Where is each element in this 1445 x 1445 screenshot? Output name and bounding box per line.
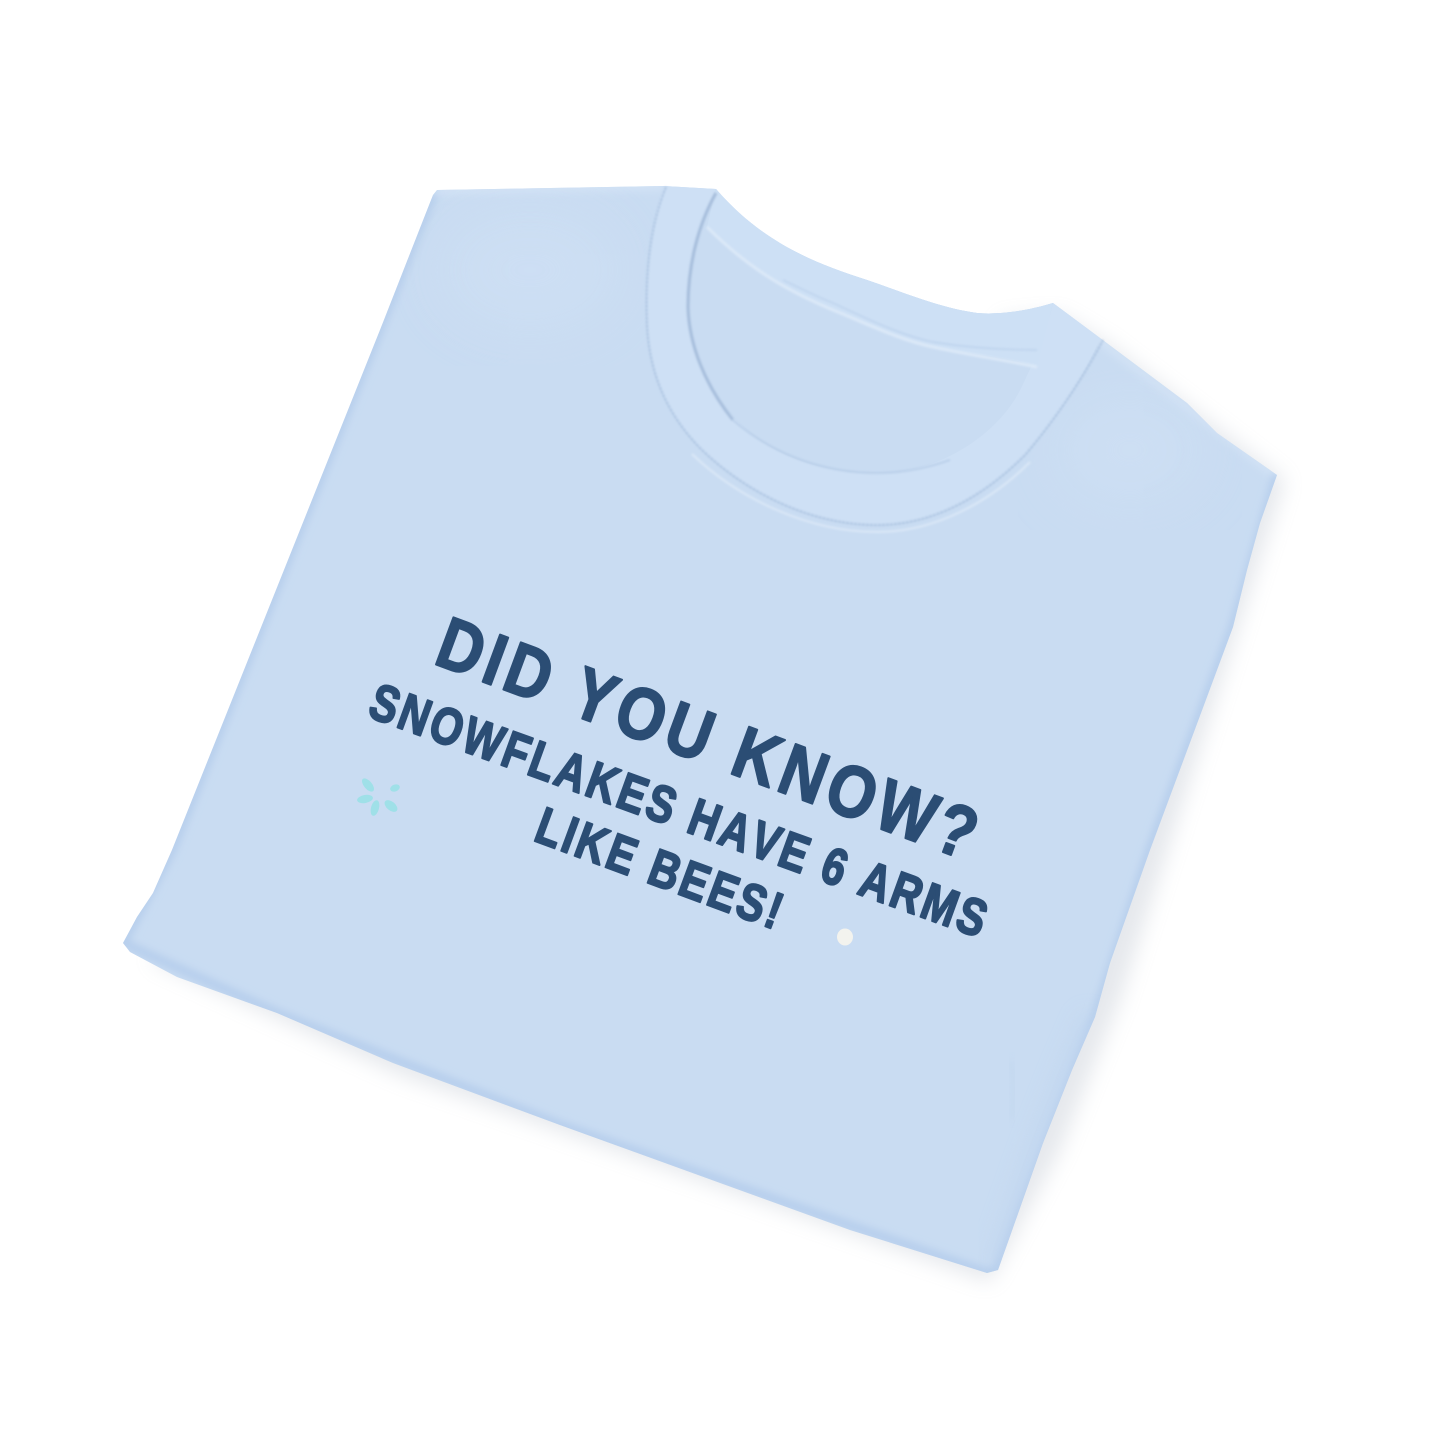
printed heading: did you know: DID YOU KNOW? [426,602,993,877]
collar band [647,186,1100,525]
drop shadow [150,315,1285,1282]
icon: partial snowflake [356,776,401,817]
collar [647,186,1103,532]
collar stitching [647,187,1103,525]
back collar band [707,189,1053,367]
t-shirt [123,186,1285,1282]
infographic: folded t-shirt product image [123,186,1286,1282]
printed line: like bees: LIKE BEES! [528,795,794,941]
inner neck [688,189,1053,473]
icon: white dot [837,928,853,946]
back collar seam [707,227,1037,367]
shirt body [123,186,1277,1273]
collar crease [688,193,733,420]
printed line: snowflakes have 6 arms: SNOWFLAKES HAVE 6 ARMS [362,671,998,949]
fabric shading [123,186,1277,1273]
